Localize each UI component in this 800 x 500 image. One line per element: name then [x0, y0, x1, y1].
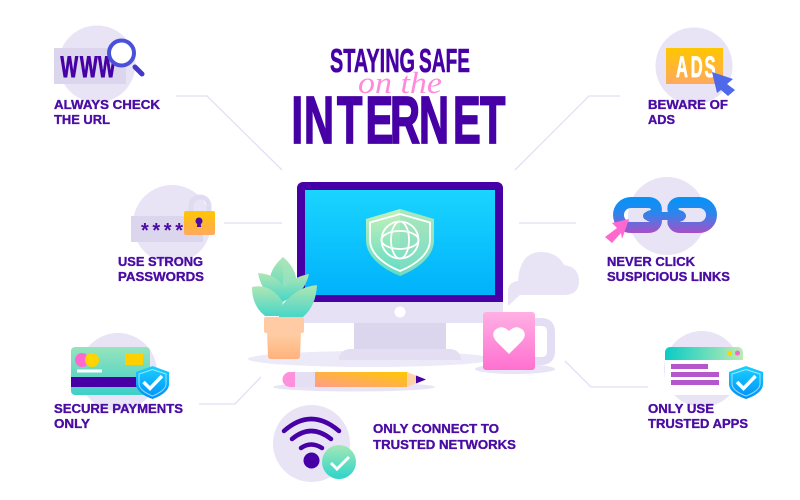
panel: always check the URL: THE URL [54, 112, 110, 127]
title: INTERNET [292, 83, 505, 157]
pencil [273, 372, 435, 392]
panel: use strong passwords: **** [141, 220, 183, 242]
panel: use strong passwords [118, 185, 215, 284]
icon: cursor [712, 72, 735, 96]
computer monitor [297, 182, 503, 360]
panel: never click suspicious links [605, 177, 730, 284]
panel: beware of ads: BEWARE OF [648, 97, 728, 112]
icon: heart [493, 327, 525, 354]
icon: app window [665, 347, 743, 395]
panel: beware of ads: ADS [676, 51, 716, 84]
icon: wifi [284, 419, 339, 468]
panel: never click suspicious links: SUSPICIOUS LINKS [607, 269, 730, 284]
panel: only use trusted apps: ONLY USE [648, 401, 714, 416]
panel: only connect to trusted networks: ONLY CONNECT TO [373, 421, 499, 436]
panel: always check the URL: ALWAYS CHECK [54, 97, 161, 112]
title: on the [358, 65, 442, 100]
panel: beware of ads [648, 28, 735, 127]
plant [252, 257, 317, 359]
icon: shield check [136, 366, 169, 399]
panel: only connect to trusted networks: TRUSTED NETWORKS [373, 437, 516, 452]
icon: chain link [618, 202, 712, 228]
icon: pink cursor [605, 219, 629, 243]
connector lines [176, 96, 648, 404]
panel: only connect to trusted networks [273, 405, 516, 482]
coffee mug [475, 312, 555, 374]
desk shadow [248, 351, 492, 367]
icon: shield check [729, 366, 763, 399]
panel: always check the URL [54, 26, 161, 127]
panel: never click suspicious links: NEVER CLICK [607, 254, 696, 269]
panel: beware of ads: ADS [648, 112, 675, 127]
icon: shield globe [366, 209, 434, 276]
icon: credit card [71, 347, 150, 395]
icon: check badge [322, 445, 356, 479]
panel: secure payments only: SECURE PAYMENTS [54, 401, 183, 416]
panel: always check the URL: WWW [61, 51, 116, 84]
panel: use strong passwords: PASSWORDS [118, 269, 204, 284]
icon: magnifying glass [109, 40, 142, 74]
panel: use strong passwords: USE STRONG [118, 254, 203, 269]
title: STAYING [330, 42, 415, 79]
panel: only use trusted apps [648, 331, 763, 431]
icon: padlock [184, 197, 215, 235]
panel: secure payments only [54, 333, 183, 431]
panel: secure payments only: ONLY [54, 416, 90, 431]
title [292, 42, 505, 157]
speech cloud [508, 252, 579, 306]
panel: only use trusted apps: TRUSTED APPS [648, 416, 748, 431]
title: SAFE [419, 42, 470, 79]
